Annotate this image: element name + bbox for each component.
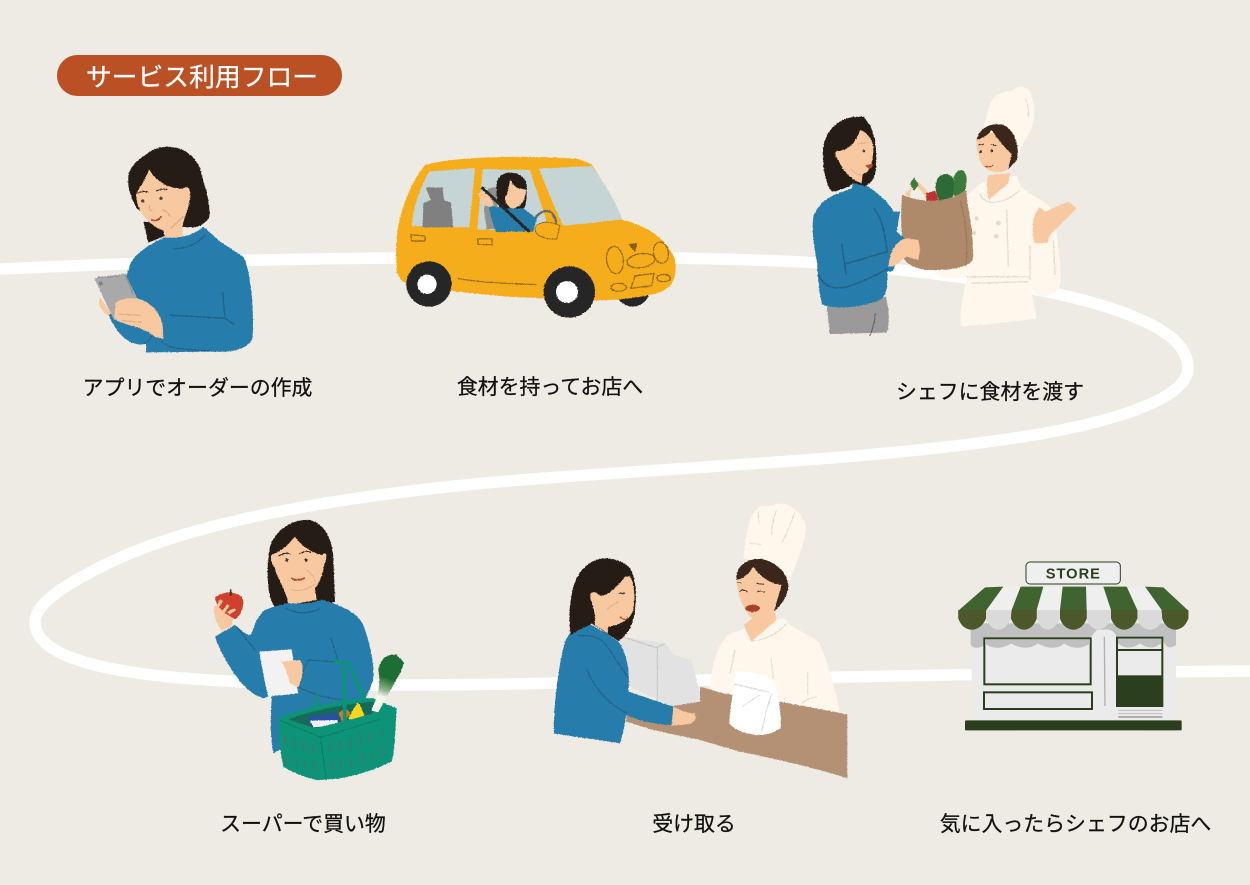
illustration: yellow car with driver <box>396 157 676 318</box>
illustration: woman using smartphone <box>94 147 253 352</box>
label: step 4: スーパーで買い物 <box>220 813 386 836</box>
label: step 6: 気に入ったらシェフのお店へ <box>940 813 1211 836</box>
title pill <box>57 55 342 96</box>
label: step 3: シェフに食材を渡す <box>896 381 1084 404</box>
illustration: woman shopping with basket <box>214 520 404 780</box>
title pill: サービス利用フロー <box>86 63 318 92</box>
illustration: receiving order from chef <box>554 504 847 778</box>
illustration: store front: STORE <box>1046 567 1101 583</box>
winding road path <box>0 257 1250 685</box>
illustration: handing ingredients to chef <box>813 87 1077 336</box>
label: step 5: 受け取る <box>652 813 736 836</box>
label: step 1: アプリでオーダーの作成 <box>83 377 313 400</box>
illustration: store front <box>958 562 1188 730</box>
label: step 2: 食材を持ってお店へ <box>457 376 643 399</box>
